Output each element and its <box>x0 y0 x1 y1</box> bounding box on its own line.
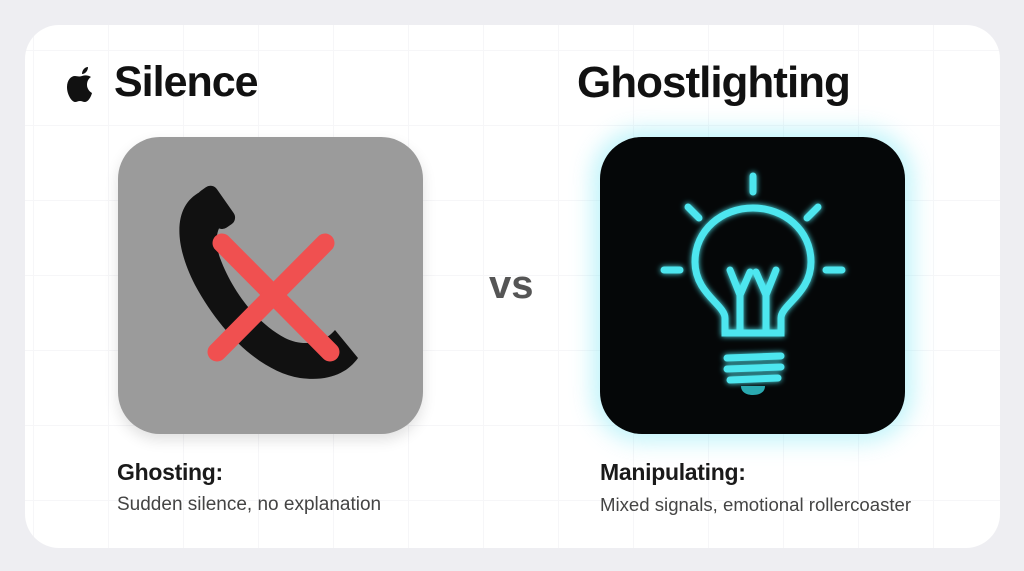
panel: ghostlighting icon box <box>600 137 905 434</box>
text: ghosting description: Sudden silence, no explanation <box>117 494 381 515</box>
text: manipulating heading: Manipulating: <box>600 459 746 485</box>
title: Ghostlighting: Ghostlighting <box>577 58 850 107</box>
icon: phone with red X <box>179 186 358 379</box>
icon: neon lightbulb <box>656 168 850 395</box>
vs label: vs <box>489 263 534 307</box>
icon: apple <box>67 67 92 102</box>
panel: ghosting icon box <box>118 137 423 434</box>
text: ghosting heading: Ghosting: <box>117 459 223 485</box>
text: manipulating description: Mixed signals, emotional rollercoaster <box>600 494 911 515</box>
title: Silence with apple icon: Silence <box>114 58 258 106</box>
